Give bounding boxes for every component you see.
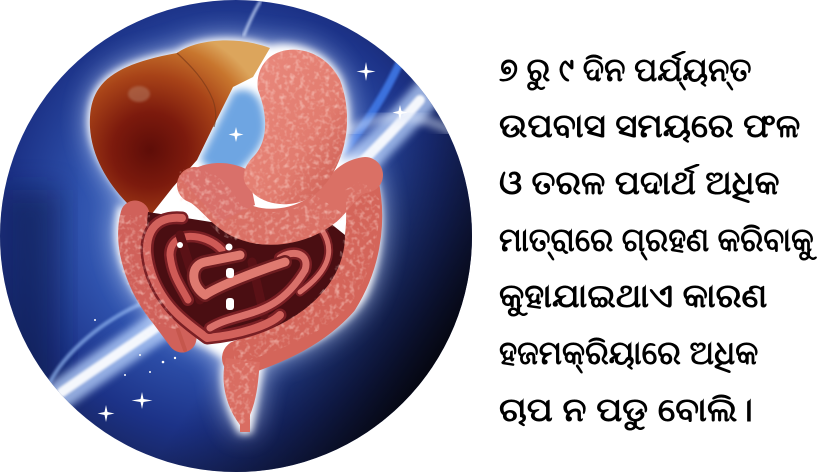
rectum	[224, 358, 260, 432]
white glow around organs	[90, 40, 380, 432]
colon top near stomach	[180, 163, 255, 222]
line 6: ହଜମକ୍ରିୟାରେ ଅଧିକ	[499, 334, 758, 371]
line 3: ଓ ତରଳ ପଦାର୍ଥ ଅଧିକ	[499, 164, 779, 201]
line 1: ୭ ରୁ ୯ ଦିନ ପର୍ଯ୍ୟନ୍ତ	[499, 51, 751, 88]
line 4: ମାତ୍ରାରେ ଗ୍ରହଣ କରିବାକୁ	[499, 221, 814, 258]
liver	[90, 40, 270, 220]
small intestine loops	[147, 218, 329, 338]
text block: Odia fasting advice	[499, 51, 817, 430]
transverse colon	[195, 175, 365, 227]
line 7: ଚାପ ନ ପଡୁ ବୋଲି।	[499, 391, 753, 428]
illustration: digestive system in a circle	[0, 0, 472, 472]
small intestine backing	[147, 212, 345, 342]
light streaks	[45, 2, 450, 395]
appendix tip	[178, 330, 185, 350]
line 5: କୁହାଯାଇଥାଏ କାରଣ	[499, 277, 767, 314]
colon and small intestine	[133, 163, 365, 432]
photo background	[0, 0, 473, 473]
tissue mottling	[116, 50, 380, 425]
descending colon	[240, 190, 364, 358]
line 2: ଉପବାସ ସମୟରେ ଫଳ	[499, 107, 800, 144]
stomach	[244, 50, 347, 204]
white gaps	[168, 197, 234, 310]
ascending colon	[133, 215, 182, 338]
sparkle stars	[94, 62, 408, 422]
gap behind stomach	[200, 90, 265, 174]
